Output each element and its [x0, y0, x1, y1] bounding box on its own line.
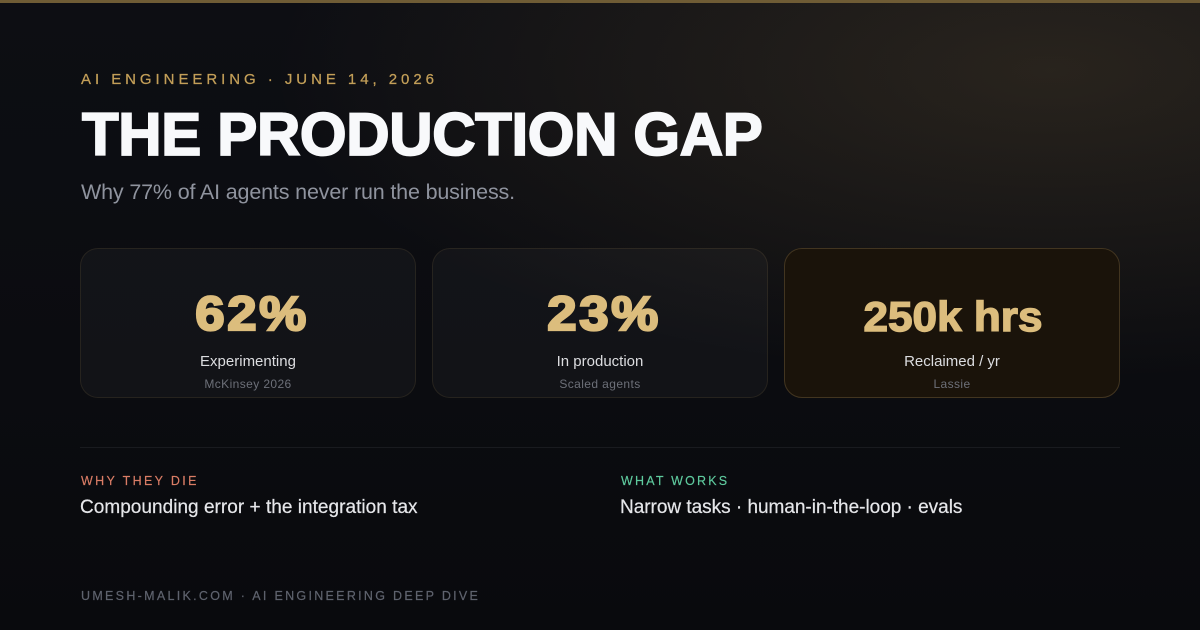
panel: experimenting stat — [80, 248, 416, 398]
footer: UMESH-MALIK.COM · AI ENGINEERING DEEP DIVE — [81, 589, 480, 603]
stat source: Lassie — [933, 377, 971, 391]
block text: Compounding error + the integration tax — [80, 497, 418, 518]
stat source: McKinsey 2026 — [204, 377, 292, 391]
block heading: WHAT WORKS — [621, 474, 729, 488]
title: THE PRODUCTION GAP — [82, 101, 762, 168]
top accent bar — [0, 0, 1200, 3]
stat label: Experimenting — [200, 353, 296, 370]
stat source: Scaled agents — [559, 377, 641, 391]
stat label: Reclaimed / yr — [904, 353, 1000, 370]
subtitle: Why 77% of AI agents never run the business. — [81, 180, 515, 204]
stat value: 250k hrs — [864, 293, 1042, 340]
block: why they die — [80, 474, 418, 518]
panel: reclaimed hours stat — [784, 248, 1120, 398]
stat value: 23% — [547, 288, 661, 341]
block: what works — [620, 474, 962, 518]
eyebrow: category and date: AI ENGINEERING · JUNE 14, 2026 — [81, 71, 438, 88]
block heading: WHY THEY DIE — [81, 474, 199, 488]
block text: Narrow tasks · human-in-the-loop · evals — [620, 497, 962, 518]
stat value: 62% — [195, 288, 309, 341]
stat label: In production — [557, 353, 643, 370]
panel: in production stat — [432, 248, 768, 398]
